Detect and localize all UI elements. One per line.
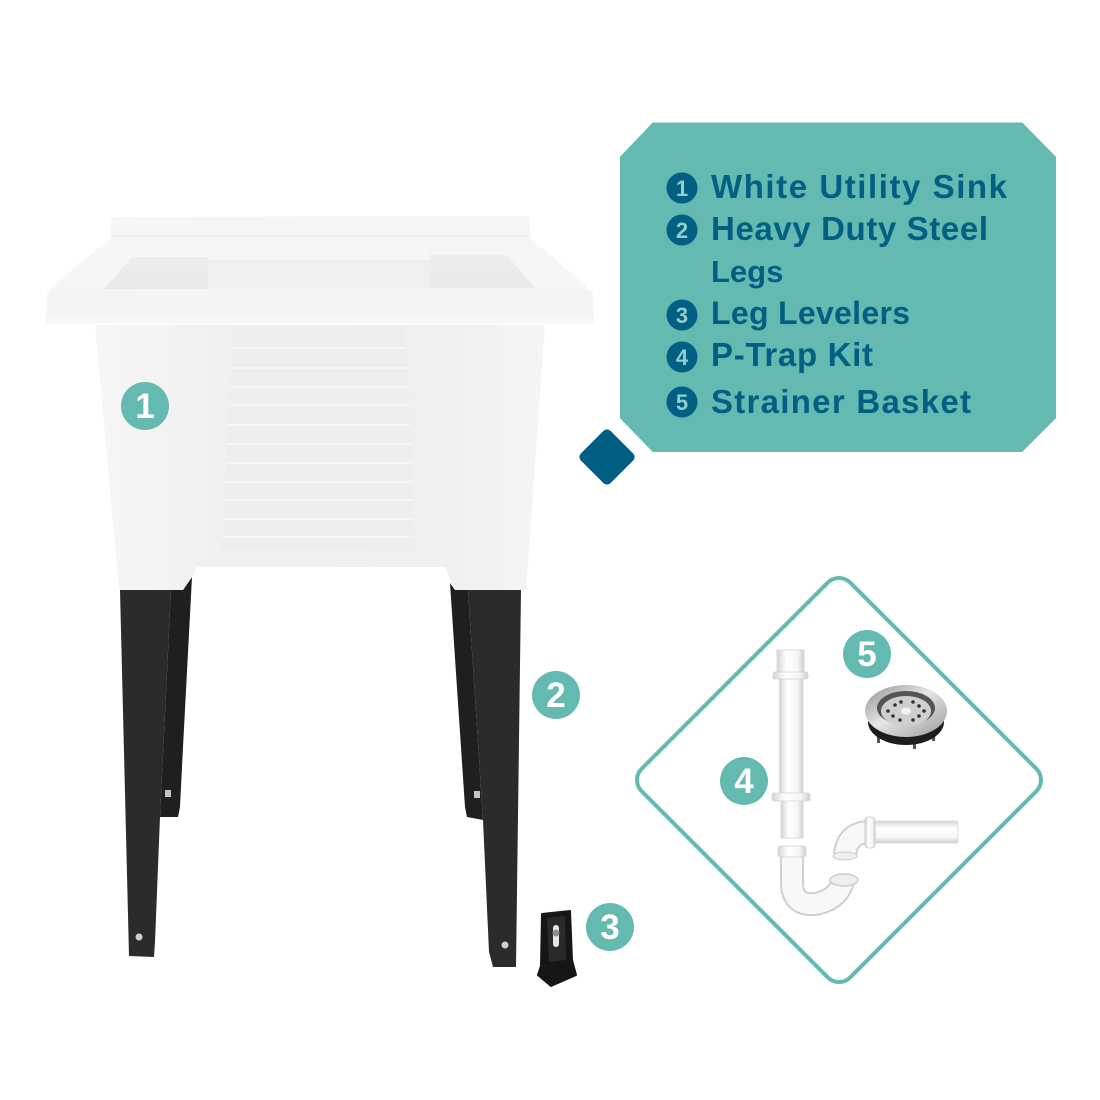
- U-bend: [778, 846, 858, 904]
- rear steel legs: [160, 577, 483, 820]
- callout badge 4: [720, 757, 768, 805]
- callout badge 3: 3: [600, 908, 620, 947]
- item 3: Leg Levelers: 3: [676, 303, 688, 328]
- callout badge 5: 5: [857, 635, 877, 674]
- item 5: Strainer Basket: 5: [676, 390, 688, 415]
- callout badge 2: 2: [546, 676, 566, 715]
- item 1: White Utility Sink: White Utility Sink: [711, 168, 1008, 205]
- callout badge 4: 4: [734, 762, 754, 801]
- arm elbow: [833, 817, 958, 860]
- callout badge 1: 1: [135, 387, 155, 426]
- sink basin: [104, 243, 535, 289]
- sink tub body: [95, 325, 545, 590]
- item 2: Heavy Duty Steel Legs: Heavy Duty Steel: [711, 210, 988, 247]
- panel: accessories diamond: [630, 571, 1048, 989]
- item 1: White Utility Sink: 1: [676, 176, 688, 201]
- icon: leg leveler part: [538, 911, 576, 986]
- item 4: P-Trap Kit: P-Trap Kit: [711, 336, 873, 373]
- panel: parts list: [620, 123, 1056, 452]
- item 5: Strainer Basket: Strainer Basket: [711, 383, 971, 420]
- item 4: P-Trap Kit: 4: [676, 345, 689, 370]
- item 2: Heavy Duty Steel Legs: 2: [676, 218, 688, 243]
- photo: utility sink with legs: [46, 216, 594, 967]
- sink rim and backsplash: [46, 216, 594, 324]
- item 2: Heavy Duty Steel Legs: [666, 210, 988, 289]
- item 3: Leg Levelers: Leg Levelers: [711, 295, 910, 331]
- callout badge 5: [843, 630, 891, 678]
- left front steel leg: [120, 590, 171, 957]
- icon: small blue diamond pointer: [577, 427, 637, 487]
- right front steel leg: [468, 590, 521, 967]
- tailpiece pipe: [772, 650, 810, 838]
- item 2: Heavy Duty Steel Legs: Legs: [711, 254, 783, 289]
- callout badge 2: [532, 671, 580, 719]
- callout badge 3: [586, 903, 634, 951]
- photo: strainer basket: [865, 685, 947, 749]
- callout badge 1: [121, 382, 169, 430]
- photo: P-trap kit: [772, 650, 958, 904]
